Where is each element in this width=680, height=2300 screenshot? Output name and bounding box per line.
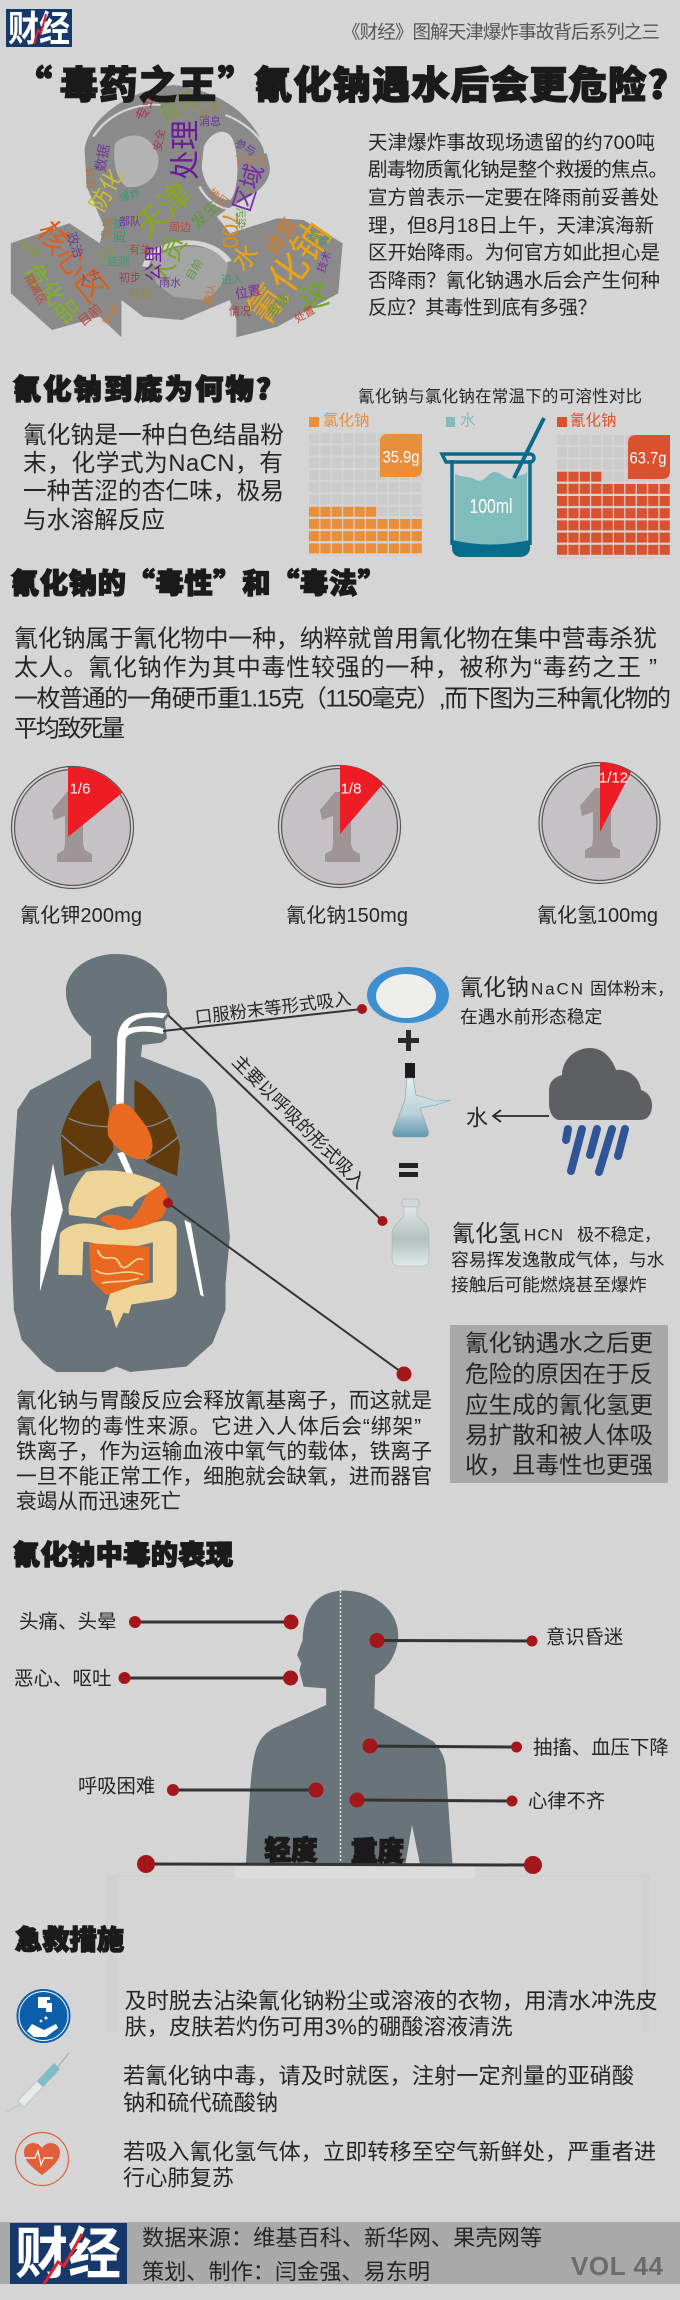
legend and grid: sodium cyanide xyxy=(557,412,671,557)
word cloud gas mask: 专家 xyxy=(306,229,331,249)
word cloud gas mask: 安全 xyxy=(150,128,168,152)
intro paragraph xyxy=(368,132,668,319)
centre divider xyxy=(340,1587,342,1863)
symptom: headache: 头痛、头晕 xyxy=(19,1611,117,1633)
beaker of water xyxy=(442,412,544,557)
word cloud gas mask: 这 xyxy=(295,277,333,317)
pointer: stomach reaction xyxy=(163,1198,412,1382)
icon: syringe xyxy=(6,2053,69,2112)
water arrow from rain: 水 xyxy=(466,1106,488,1130)
HCN description: 接触后可能燃烧甚至爆炸 xyxy=(451,1275,647,1295)
duodenum xyxy=(100,1185,167,1230)
intro paragraph: 区开始降雨。为何官方如此担心是 xyxy=(368,242,660,264)
toxicity mechanism paragraph: 氰化物的毒性来源。它进入人体后会“绑架” xyxy=(16,1416,421,1438)
legend and grid: sodium chloride: 35.9g xyxy=(382,448,420,466)
rectum xyxy=(108,1303,128,1328)
title xyxy=(14,54,668,110)
word cloud gas mask: 参与 xyxy=(232,136,259,159)
word cloud gas mask: 位置 xyxy=(234,282,262,302)
word cloud gas mask: 发生 xyxy=(188,197,223,232)
word cloud gas mask: 危险 xyxy=(98,216,116,240)
toxicity mechanism paragraph: 铁离子，作为运输血液中氧气的载体，铁离子 xyxy=(16,1440,432,1464)
word cloud gas mask: 核心区 xyxy=(30,215,114,309)
HCN description: 氰化氢 xyxy=(452,1220,521,1246)
symptom: breathing difficulty: 呼吸困难 xyxy=(78,1776,155,1798)
toxicity paragraph: 太人。氰化钠作为其中毒性较强的一种，被称为“毒药之王 ” xyxy=(14,654,657,682)
NaCN description: 氰化钠 xyxy=(460,974,529,1000)
symptom: coma: 意识昏迷 xyxy=(546,1626,623,1648)
beaker of water: 100ml xyxy=(470,496,512,518)
footer logo: 财经 xyxy=(15,2210,121,2290)
heading: toxicity: 氰化钠的“毒性”和“毒法” xyxy=(11,562,386,602)
word cloud gas mask: 水 xyxy=(225,237,265,277)
word cloud gas mask: 数据 xyxy=(92,143,112,173)
word cloud gas mask: 专业 xyxy=(133,91,157,123)
word cloud gas mask: 现场 xyxy=(156,87,204,127)
legend and grid: sodium cyanide: 氰化钠 xyxy=(570,412,617,430)
legend and grid: sodium cyanide: 63.7g xyxy=(630,448,666,468)
word cloud gas mask: 处置 xyxy=(292,303,318,326)
word cloud gas mask: 政治 xyxy=(64,230,86,260)
first aid step 3: 行心肺复苏 xyxy=(123,2166,234,2190)
first aid step 1: 及时脱去沾染氰化钠粉尘或溶液的衣物，用清水冲洗皮 xyxy=(124,1988,658,2014)
title: “ xyxy=(14,54,52,110)
series subtitle: 《财经》图解天津爆炸事故背后系列之三 xyxy=(342,22,660,42)
word cloud gas mask: 初步 xyxy=(119,270,141,284)
footer band xyxy=(0,2210,680,2290)
side highlights xyxy=(40,1163,204,1297)
HCN description xyxy=(451,1220,665,1295)
coin: sodium cyanide xyxy=(278,765,408,927)
word cloud gas mask: 处理 xyxy=(170,120,202,180)
toxicity paragraph: 一枚普通的一角硬币重1.15克（1150毫克）,而下图为三种氰化物的 xyxy=(14,686,671,712)
anatomy figure xyxy=(11,954,230,1372)
callout: why water makes it dangerous xyxy=(450,1325,668,1483)
heading: first aid: 急救措施 xyxy=(15,1918,124,1958)
icon: white powder xyxy=(367,967,449,1023)
callout: why water makes it dangerous: 收，且毒性也更强 xyxy=(465,1452,653,1478)
base platform xyxy=(235,1866,475,1878)
icon: heartbeat xyxy=(16,2132,68,2186)
word cloud gas mask: 地区 xyxy=(206,186,231,210)
legend and grid: sodium chloride: 氯化钠 xyxy=(323,412,370,430)
solubility chart xyxy=(309,387,671,557)
lungs xyxy=(61,1080,180,1176)
first aid step 3: 若吸入氰化氢气体，立即转移至空气新鲜处，严重者进 xyxy=(123,2140,656,2164)
word cloud gas mask: 排查 xyxy=(262,214,302,260)
credits xyxy=(142,2226,542,2284)
word cloud gas mask: 距离 xyxy=(112,217,128,243)
masthead logo: 财经 xyxy=(8,0,70,52)
NaCN description: NaCN xyxy=(531,980,583,998)
title: 氰化钠遇水后会更危险? xyxy=(254,54,668,110)
credits: 数据来源：维基百科、新华网、果壳网等 xyxy=(142,2226,542,2250)
coin: potassium cyanide: 氰化钾200mg xyxy=(20,904,142,927)
pointer: inhalation: 主要以呼吸的形式吸入 xyxy=(228,1051,370,1193)
HCN description: 极不稳定， xyxy=(577,1226,661,1244)
small intestine xyxy=(89,1243,150,1295)
heading: symptoms: 氰化钠中毒的表现 xyxy=(13,1534,233,1572)
word cloud gas mask: 氰化钠 xyxy=(240,214,340,332)
NaCN description: 固体粉末， xyxy=(590,980,674,998)
word cloud gas mask: 救援 xyxy=(264,290,292,320)
first aid step 2 xyxy=(123,2064,634,2116)
plus sign xyxy=(398,1030,419,1051)
first aid step 1 xyxy=(124,1988,658,2040)
first aid step 3 xyxy=(123,2140,656,2190)
word cloud gas mask: 进入 xyxy=(221,273,243,286)
word cloud gas mask: 防化 xyxy=(85,165,127,215)
stomach xyxy=(69,1170,160,1218)
intro paragraph: 天津爆炸事故现场遗留的约700吨 xyxy=(368,132,655,154)
intro paragraph: 否降雨？氰化钠遇水后会产生何种 xyxy=(368,270,660,292)
what is NaCN text: 末，化学式为NaCN，有 xyxy=(23,450,283,477)
word cloud gas mask: 污染 xyxy=(234,207,248,229)
word cloud gas mask: 消息 xyxy=(199,114,221,128)
word cloud gas mask: 区域 xyxy=(229,161,269,215)
word cloud gas mask: 公里 xyxy=(144,245,164,281)
word cloud gas mask: 700 xyxy=(235,152,267,168)
toxicity mechanism paragraph: 衰竭从而迅速死亡 xyxy=(16,1490,181,1514)
body silhouette xyxy=(11,954,230,1372)
toxicity mechanism paragraph: 一旦不能正常工作，细胞就会缺氧，进而器官 xyxy=(16,1466,432,1488)
word cloud gas mask: 天津 xyxy=(127,175,199,245)
callout: why water makes it dangerous: 危险的原因在于反 xyxy=(465,1361,653,1387)
coin: potassium cyanide xyxy=(12,766,142,927)
word cloud gas mask: 工作 xyxy=(92,243,118,266)
small intestine folds xyxy=(95,1250,143,1283)
icon: hand washing xyxy=(16,1989,70,2043)
volume number: VOL 44 xyxy=(571,2251,664,2281)
word cloud gas mask: 雨水 xyxy=(159,276,181,289)
toxicity paragraph: 氰化钠属于氰化物中一种，纳粹就曾用氰化物在集中营毒杀犹 xyxy=(14,626,657,652)
callout: why water makes it dangerous: 易扩散和被人体吸 xyxy=(465,1422,653,1448)
water arrow from rain xyxy=(466,1106,549,1130)
large intestine xyxy=(70,1230,165,1312)
pointer: oral absorption: 口服粉末等形式吸入 xyxy=(194,988,352,1028)
symptoms figure silhouette xyxy=(246,1591,452,1863)
symptom: coma xyxy=(370,1626,623,1648)
word cloud gas mask: 周边 xyxy=(169,221,191,234)
coin: sodium cyanide: 1/8 xyxy=(341,780,361,798)
word cloud gas mask: 中毒 xyxy=(17,238,43,261)
first aid step 2: 钠和硫代硫酸钠 xyxy=(123,2090,278,2116)
word cloud gas mask xyxy=(11,85,343,337)
word cloud gas mask: 情况 xyxy=(229,305,251,318)
symptom: convulsions: 抽搐、血压下降 xyxy=(533,1737,669,1759)
toxicity mechanism paragraph: 氰化钠与胃酸反应会释放氰基离子，而这就是 xyxy=(16,1390,432,1412)
callout: why water makes it dangerous: 氰化钠遇水之后更 xyxy=(465,1330,653,1356)
word cloud gas mask: 应急 xyxy=(196,98,223,121)
equals sign xyxy=(399,1163,418,1177)
word cloud gas mask: 防护 xyxy=(100,301,123,328)
icon: flask xyxy=(393,1063,451,1137)
word cloud gas mask: 监测 xyxy=(107,255,129,268)
airway xyxy=(116,1013,167,1177)
word cloud gas mask: 700 xyxy=(218,212,242,248)
toxicity paragraph xyxy=(14,626,671,742)
callout: why water makes it dangerous: 应生成的氰化氢更 xyxy=(465,1392,653,1418)
coin: hydrogen cyanide xyxy=(537,762,660,927)
toxicity paragraph: 平均致死量 xyxy=(14,716,125,742)
coin: hydrogen cyanide: 氰化氢100mg xyxy=(537,904,658,927)
severity axis: 重度 xyxy=(351,1830,404,1868)
intro paragraph: 理，但8月18日上午，天津滨海新 xyxy=(368,215,654,237)
HCN description: 容易挥发逸散成气体，与水 xyxy=(451,1250,665,1270)
chart title: 氰化钠与氯化钠在常温下的可溶性对比 xyxy=(358,387,642,406)
what is NaCN text: 与水溶解反应 xyxy=(23,507,165,534)
intro paragraph: 剧毒物质氰化钠是整个救援的焦点。 xyxy=(368,159,668,181)
icon: rain cloud xyxy=(549,1048,652,1172)
word cloud gas mask: 部队 xyxy=(119,214,141,228)
word cloud gas mask: 隔离区 xyxy=(22,272,50,307)
word cloud gas mask: 人员 xyxy=(146,231,192,289)
word cloud gas mask: 现场 xyxy=(84,167,98,189)
word cloud gas mask: 爆炸 xyxy=(117,185,142,205)
word cloud gas mask: 危化品 xyxy=(20,258,84,328)
what is NaCN text: 氰化钠是一种白色结晶粉 xyxy=(23,422,284,449)
symptom: convulsions xyxy=(362,1737,669,1759)
first aid step 1: 肤，皮肤若灼伤可用3%的硼酸溶液清洗 xyxy=(124,2014,512,2040)
coin: potassium cyanide: 1/6 xyxy=(70,780,90,798)
NaCN description: 在遇水前形态稳定 xyxy=(460,1007,602,1027)
symptom: arrhythmia: 心律不齐 xyxy=(528,1790,605,1812)
word cloud gas mask: 技术 xyxy=(315,249,334,274)
pointer: inhalation xyxy=(168,1015,388,1226)
heading: what is NaCN: 氰化钠到底为何物? xyxy=(13,368,271,408)
what is NaCN text xyxy=(23,422,284,534)
NaCN description xyxy=(460,974,674,1027)
title: ” xyxy=(218,54,256,110)
word cloud gas mask: 确认 xyxy=(201,283,218,307)
first aid step 2: 若氰化钠中毒，请及时就医，注射一定剂量的亚硝酸 xyxy=(123,2064,634,2088)
word cloud gas mask: 检测 xyxy=(129,287,151,301)
severity axis: 轻度 xyxy=(264,1828,318,1868)
title: 毒药之王 xyxy=(60,54,216,110)
intro paragraph: 宣方曾表示一定要在降雨前妥善处 xyxy=(368,187,659,209)
symptom: nausea xyxy=(14,1668,298,1690)
word cloud gas mask: 有关 xyxy=(129,242,151,256)
word cloud gas mask: 目前 xyxy=(75,301,105,329)
icon: reagent bottle xyxy=(392,1199,429,1266)
what is NaCN text: 一种苦涩的杏仁味，极易 xyxy=(23,478,284,505)
heart xyxy=(108,1103,153,1159)
coin: hydrogen cyanide: 1/12 xyxy=(599,770,628,786)
beaker of water: 水 xyxy=(460,412,476,430)
severity axis xyxy=(137,1828,542,1874)
intro paragraph: 反应？其毒性到底有多强？ xyxy=(368,297,597,319)
legend and grid: sodium chloride xyxy=(309,412,423,556)
word cloud gas mask: 人士 xyxy=(77,268,102,287)
symptom: headache xyxy=(19,1611,298,1633)
faint background frame xyxy=(106,1875,650,2032)
symptom: breathing difficulty xyxy=(78,1776,324,1798)
credits: 策划、制作：闫金强、易东明 xyxy=(142,2260,430,2284)
word cloud gas mask: 目前 xyxy=(183,256,206,283)
symptom: nausea: 恶心、呕吐 xyxy=(14,1668,112,1690)
symptom: arrhythmia xyxy=(350,1790,605,1812)
toxicity mechanism paragraph xyxy=(16,1390,432,1514)
HCN description: HCN xyxy=(524,1226,563,1244)
coin: sodium cyanide: 氰化钠150mg xyxy=(286,904,408,927)
